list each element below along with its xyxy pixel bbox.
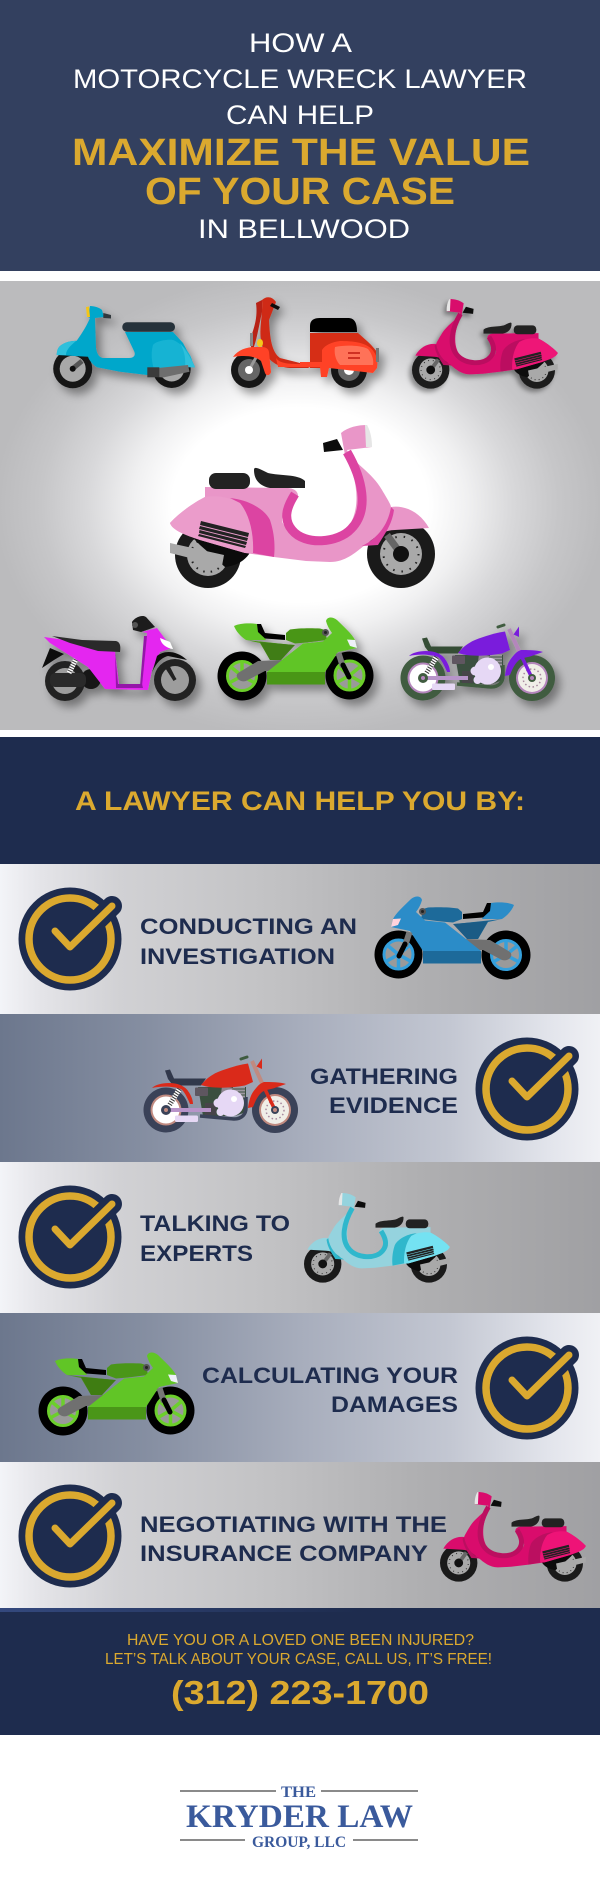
panel: conducting an investigation <box>0 864 600 1014</box>
icon: red cruiser <box>144 1057 298 1133</box>
text block: EVIDENCE <box>329 1093 458 1118</box>
panel: gathering evidence <box>0 1014 600 1162</box>
heading: intro <box>73 28 527 130</box>
text block: GATHERING <box>310 1064 458 1089</box>
logo: the kryder law group: THE <box>281 1784 316 1801</box>
icon: check <box>476 1038 578 1140</box>
icon: purple step-through scooter <box>42 616 196 701</box>
logo: the kryder law group <box>180 1784 418 1851</box>
text block: CALCULATING YOUR <box>202 1363 458 1388</box>
icon: red scooter <box>231 297 379 388</box>
panel: calculating your damages <box>0 1313 600 1462</box>
heading: gold title: MAXIMIZE THE VALUE <box>72 132 530 174</box>
icon: blue sport bike <box>374 896 530 980</box>
text block <box>140 1512 447 1566</box>
panel: header <box>0 0 600 271</box>
text block: EXPERTS <box>140 1241 253 1266</box>
heading: gold title <box>72 132 530 213</box>
panel: motorcycle gallery <box>0 281 600 730</box>
panel: negotiating <box>0 1462 600 1608</box>
icon: check <box>18 1186 122 1288</box>
text block: INVESTIGATION <box>140 944 335 969</box>
text block: DAMAGES <box>331 1392 458 1417</box>
icon: check <box>18 1484 122 1588</box>
heading: a lawyer can help you by: A LAWYER CAN HELP YOU BY: <box>75 786 525 816</box>
text block <box>140 914 357 969</box>
text block <box>310 1064 458 1118</box>
panel: talking to experts <box>0 1162 600 1313</box>
icon: purple cruiser <box>400 625 555 701</box>
icon: check <box>18 888 122 990</box>
phone number: (312) 223-1700 <box>171 1674 429 1711</box>
panel: lawyer heading <box>0 737 600 864</box>
text block: TALKING TO <box>140 1211 290 1236</box>
icon: large pink scooter <box>170 425 435 588</box>
logo: the kryder law group: GROUP, LLC <box>252 1834 346 1851</box>
heading: location: IN BELLWOOD <box>198 214 410 244</box>
icon: pale blue scooter <box>304 1193 450 1283</box>
text block: CONDUCTING AN <box>140 914 357 939</box>
logo: the kryder law group: KRYDER LAW <box>186 1799 413 1835</box>
icon: crimson scooter <box>440 1492 586 1582</box>
panel: call to action <box>0 1608 600 1735</box>
icon: green sport bike <box>218 617 374 700</box>
heading: intro: HOW A <box>249 28 352 58</box>
heading: intro: CAN HELP <box>226 100 374 130</box>
icon: check <box>476 1336 578 1440</box>
text block: call prompt <box>105 1632 492 1668</box>
text block <box>140 1211 290 1266</box>
text block: call prompt: HAVE YOU OR A LOVED ONE BEEN INJURED? <box>127 1632 474 1649</box>
text block: INSURANCE COMPANY <box>140 1541 428 1566</box>
heading: gold title: OF YOUR CASE <box>145 171 455 213</box>
text block: call prompt: LET’S TALK ABOUT YOUR CASE, CALL US, IT’S FREE! <box>105 1651 492 1668</box>
text block: NEGOTIATING WITH THE <box>140 1512 447 1537</box>
icon: blue scooter <box>53 306 195 388</box>
heading: intro: MOTORCYCLE WRECK LAWYER <box>73 64 527 94</box>
text block <box>202 1363 458 1417</box>
icon: green sport bike <box>38 1352 194 1436</box>
icon: magenta scooter <box>412 299 558 389</box>
